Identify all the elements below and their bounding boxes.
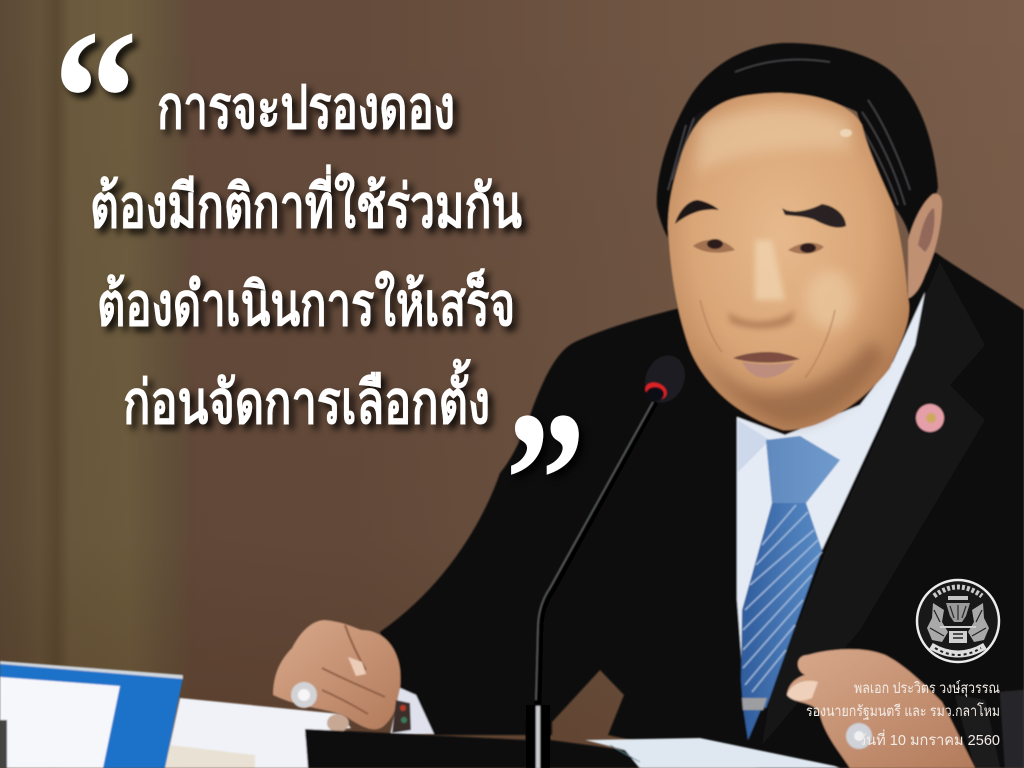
hair [657,43,938,240]
nose [755,240,785,300]
mouth [733,352,800,363]
quote text: การจะปรองดอง [157,74,455,141]
caption: name, position, date [806,680,1000,749]
wristwatch and cuff [390,688,434,735]
microphone [526,350,692,768]
ear [908,194,942,298]
rolled paper [165,698,351,768]
suit body [380,252,1024,768]
right hand [787,649,975,768]
eyes [693,240,735,253]
quote text: ก่อนจัดการเลือกตั้ง [123,358,490,436]
desk items [0,661,840,768]
lapel highlights [762,262,985,745]
left hand with ring [273,620,400,729]
caption: name, position, date: วันที่ 10 มกราคม 2560 [858,729,1000,749]
face [668,93,909,430]
lapel pin [916,404,944,432]
quote text [90,74,522,436]
tie [741,436,840,740]
emblem seal [917,580,999,662]
document [585,738,840,768]
quote text: ต้องมีกติกาที่ใช้ร่วมกัน [90,164,522,240]
name plate [0,661,183,768]
mic base foreground [526,720,550,768]
black device [305,729,640,768]
photo: speaker [273,43,1024,768]
shirt [737,292,925,680]
quote text: ต้องดำเนินการให้เสร็จ [97,268,515,338]
eyebrows [675,200,719,224]
closing quotation mark: ” [505,371,586,589]
